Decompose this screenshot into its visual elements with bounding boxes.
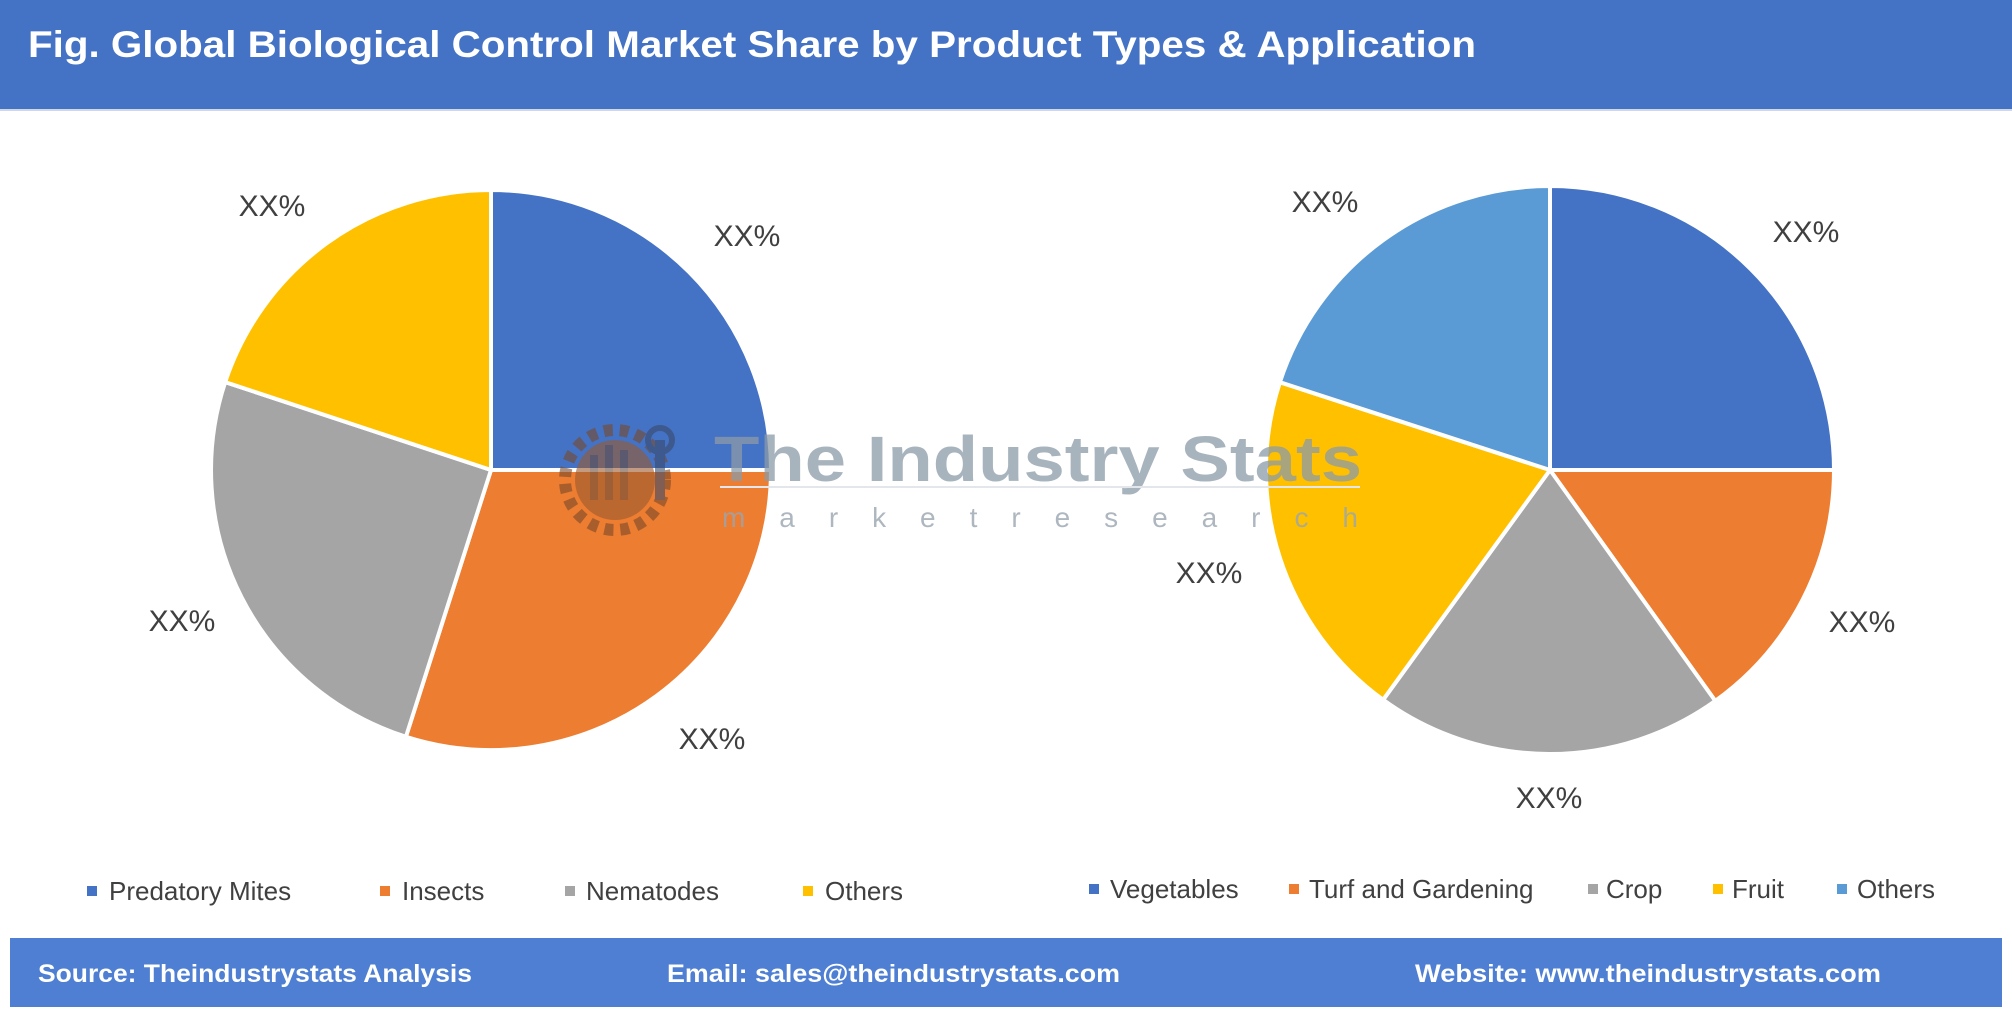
pie labels: XX%	[239, 190, 305, 223]
pie labels: XX%	[679, 723, 745, 756]
header bar	[0, 0, 2012, 111]
footer source: Source: Theindustrystats Analysis	[38, 960, 472, 988]
legend: application: Fruit	[1732, 874, 1785, 904]
pie chart: application	[1266, 186, 1834, 754]
legend: product types: Others	[825, 876, 903, 906]
legend: application: Vegetables	[1110, 874, 1239, 904]
legend: product types: Predatory Mites	[109, 876, 291, 906]
legend: application	[1089, 874, 1935, 904]
pie chart: product types	[211, 190, 771, 750]
legend: product types: Insects	[402, 876, 484, 906]
pie labels	[149, 186, 1895, 815]
watermark logo	[565, 423, 1362, 533]
pie labels: XX%	[1292, 186, 1358, 219]
pie labels: XX%	[1516, 782, 1582, 815]
pie labels: XX%	[1829, 606, 1895, 639]
footer email: Email: sales@theindustrystats.com	[667, 960, 1120, 988]
pie labels: XX%	[1773, 216, 1839, 249]
legend: product types	[87, 876, 903, 906]
legend: product types: Nematodes	[586, 876, 719, 906]
footer bar	[10, 938, 2002, 1007]
icon: gear	[565, 428, 672, 530]
pie labels: XX%	[1176, 557, 1242, 590]
pie labels: XX%	[149, 605, 215, 638]
watermark logo: The Industry Stats	[714, 423, 1362, 495]
pie labels: XX%	[714, 220, 780, 253]
legend: application: Turf and Gardening	[1309, 874, 1534, 904]
title: Fig. Global Biological Control Market Share by Product Types & Application	[28, 24, 1476, 65]
footer website: Website: www.theindustrystats.com	[1415, 960, 1881, 988]
legend: application: Crop	[1606, 874, 1662, 904]
watermark logo: m a r k e t r e s e a r c h	[722, 502, 1358, 533]
legend: application: Others	[1857, 874, 1935, 904]
